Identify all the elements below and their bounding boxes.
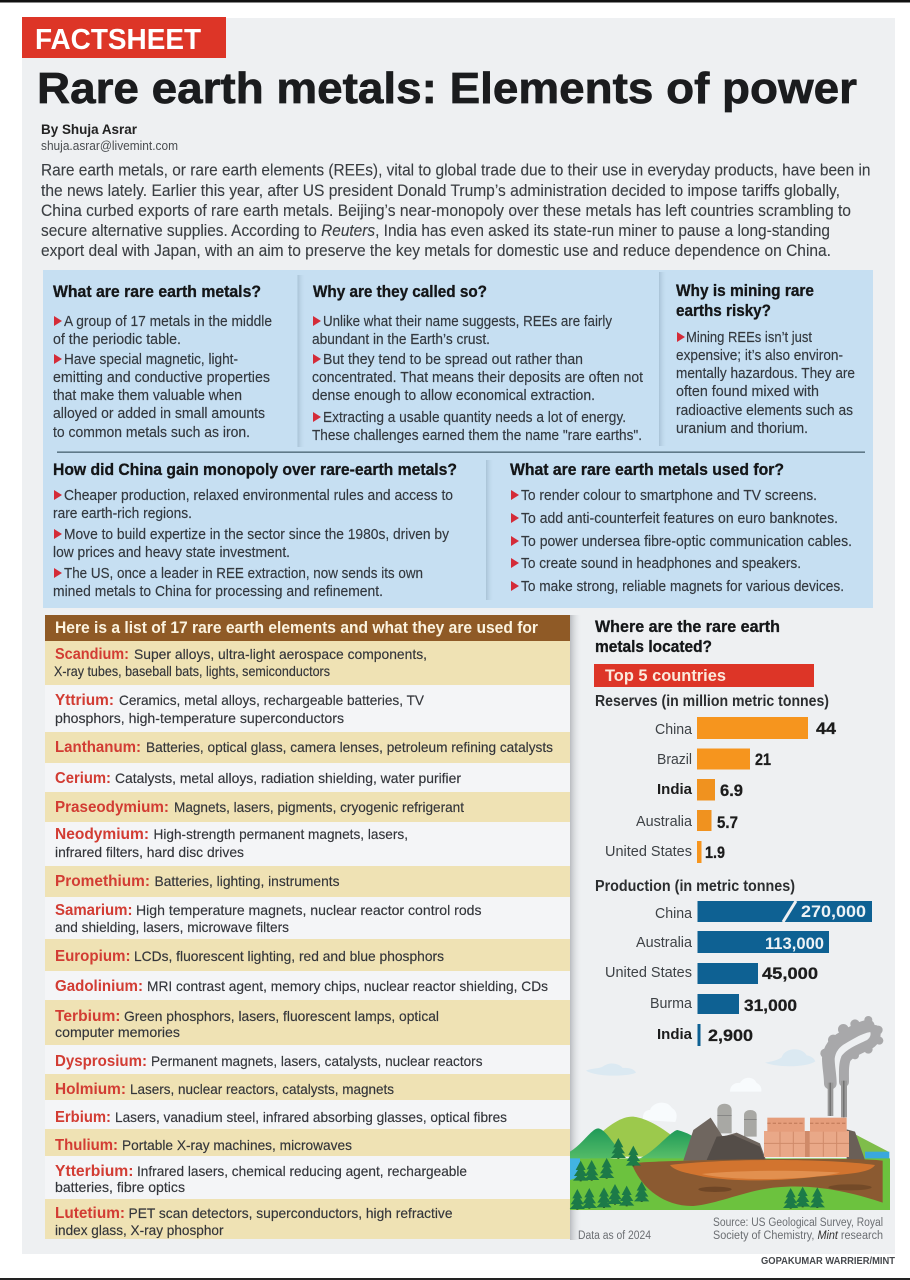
intro paragraph: China curbed exports of rare earth metals. Beijing’s near-monopoly over these metals has left countries scrambling to [41,202,851,220]
row: Terbium: computer memories [55,1024,180,1040]
ground [570,1158,890,1210]
row: Terbium: Terbium: [55,1008,120,1025]
section: china monopoly: low prices and heavy state investment. [53,545,290,561]
banner: top 5 countries: Top 5 countries [605,667,726,685]
section: why is mining risky: radioactive elements such as [676,403,853,419]
chart: reserves: 44 [816,720,837,738]
row: Scandium [45,641,570,685]
row: Erbium [45,1100,570,1129]
list header [45,615,570,641]
chart: production: Burma [650,996,693,1012]
section: what are rare earth metals: What are rare earth metals? [53,283,261,301]
chart: reserves: Australia [636,814,693,830]
trees [570,1138,825,1210]
row: Yttrium: Yttrium: [55,692,114,709]
chimneys [828,1081,847,1117]
row: Promethium [45,866,570,897]
chart: production: 2,900 [708,1027,753,1045]
row: Praseodymium [45,792,570,822]
section: uses: To power undersea fibre-optic communication cables. [521,534,852,550]
row: Ytterbium: Ytterbium: [55,1163,134,1180]
row: Holmium: Holmium: [55,1081,126,1098]
section: what are rare earth metals [53,283,272,441]
row: Lutetium [45,1199,570,1239]
chart: reserves: India [657,782,693,798]
row: Yttrium: Ceramics, metal alloys, rechargeable batteries, TV [119,692,425,708]
chart: production: 113,000 [765,935,824,953]
section: uses: To add anti-counterfeit features on euro banknotes. [521,511,838,527]
row: Ytterbium: batteries, fibre optics [55,1179,185,1195]
section: why are they called so: abundant in the Earth’s crust. [312,332,490,348]
chart: reserves [595,693,837,863]
intro paragraph: secure alternative supplies. According to Reuters, India has even asked its state-run miner to pause a long-standing [41,222,830,240]
chart: production: Australia [636,935,693,951]
row: Neodymium [45,822,570,866]
row: Holmium [45,1074,570,1100]
section: china monopoly: Cheaper production, relaxed environmental rules and access to [64,488,453,504]
section: china monopoly: mined metals to China for processing and refinement. [53,584,383,600]
row: Erbium: Lasers, vanadium steel, infrared absorbing glasses, optical fibres [115,1109,507,1125]
chart: reserves: Reserves (in million metric tonnes) [595,693,829,710]
row: Europium: LCDs, fluorescent lighting, red and blue phosphors [134,948,444,964]
row: Gadolinium: MRI contrast agent, memory chips, nuclear reactor shielding, CDs [147,978,548,994]
section: what are rare earth metals: Have special magnetic, light- [64,352,238,368]
row: Lutetium: PET scan detectors, superconductors, high refractive [128,1205,453,1221]
row: Gadolinium [45,971,570,1000]
rock piles [683,1118,865,1161]
intro paragraph: the news lately. Earlier this year, after US president Donald Trump’s administration decided to impose tariffs globally, [41,182,840,200]
section: why is mining risky: earths risky? [676,302,771,320]
row: Praseodymium: Magnets, lasers, pigments, cryogenic refrigerant [174,799,464,815]
section: why is mining risky: Why is mining rare [676,282,814,300]
chart: production: United States [605,965,692,981]
row: Samarium: and shielding, lasers, microwave filters [55,919,289,935]
factsheet tag: FACTSHEET [35,24,201,56]
section: what are rare earth metals: that make them valuable when [53,388,242,404]
section: why is mining risky: expensive; it’s also environ- [676,348,843,364]
section: why are they called so: dense enough to allow economical extraction. [312,388,595,404]
section: china monopoly: rare earth-rich regions. [53,506,192,522]
row: Neodymium: Neodymium: [55,826,149,843]
credit: GOPAKUMAR WARRIER/MINT [761,1255,896,1267]
row: Lanthanum [45,732,570,763]
row: Samarium: Samarium: [55,902,132,919]
section: why are they called so [312,283,643,444]
row: Europium: Europium: [55,948,130,965]
factsheet tag [22,17,226,58]
row: Lanthanum: Batteries, optical glass, camera lenses, petroleum refining catalysts [146,739,553,755]
section: china monopoly: The US, once a leader in REE extraction, now sends its own [64,566,423,582]
chart: production: 270,000 [801,903,866,921]
byline: shuja.asrar@livemint.com [41,139,178,153]
section: uses: To render colour to smartphone and TV screens. [521,488,817,504]
section: what are rare earth metals: A group of 17 metals in the middle [64,314,272,330]
section: what are rare earth metals: emitting and conductive properties [53,370,270,386]
section: what are rare earth metals: alloyed or added in small amounts [53,406,265,422]
section: why are they called so: Why are they called so? [313,283,487,301]
chart: reserves: Brazil [657,752,692,768]
row: Ytterbium: Infrared lasers, chemical reducing agent, rechargeable [137,1163,467,1179]
row: Lanthanum: Lanthanum: [55,739,141,756]
section: why are they called so: These challenges earned them the name "rare earths". [312,428,642,444]
section: why is mining risky: uranium and thorium. [676,421,808,437]
row: Thulium: Thulium: [55,1137,118,1154]
hills [570,1117,889,1182]
panel: explainer questions [43,270,873,608]
chart: reserves: China [655,722,693,738]
row: Yttrium: phosphors, high-temperature superconductors [55,710,344,726]
intro paragraph: Rare earth metals, or rare earth elements (REEs), vital to global trade due to their use in everyday products, have been in [41,162,870,180]
byline: By Shuja Asrar [41,121,138,137]
intro paragraph: export deal with Japan, with an aim to preserve the key metals for domestic use and reduce dependence on China. [41,242,831,260]
row: Scandium: Super alloys, ultra-light aerospace components, [134,646,427,662]
banner: top 5 countries [594,664,814,687]
silos [717,1104,757,1137]
row: Promethium: Promethium: [55,873,150,890]
section: china monopoly [53,461,457,600]
section: uses [510,461,852,595]
row: Europium [45,939,570,971]
section: china monopoly: How did China gain monopoly over rare-earth metals? [53,461,457,479]
source: Society of Chemistry, Mint research [713,1230,883,1242]
byline [41,121,178,153]
mine pit [632,1159,883,1206]
row: Scandium: X-ray tubes, baseball bats, lights, semiconductors [54,663,330,679]
row: Scandium: Scandium: [55,646,129,663]
section: why are they called so: But they tend to be spread out rather than [323,352,583,368]
note: data year: Data as of 2024 [578,1230,652,1242]
chart: production: India [657,1027,693,1043]
row: Dysprosium: Dysprosium: [55,1053,147,1070]
row: Lutetium: index glass, X-ray phosphor [55,1222,224,1238]
chart: production: 31,000 [744,997,797,1015]
row: Dysprosium: Permanent magnets, lasers, catalysts, nuclear reactors [151,1053,482,1069]
row: Dysprosium [45,1045,570,1074]
list header: Here is a list of 17 rare earth elements and what they are used for [55,619,539,637]
illustration: rare earth mine [570,1016,890,1210]
row: Terbium: Green phosphors, lasers, fluorescent lamps, optical [124,1008,439,1024]
source: Source: US Geological Survey, Royal [713,1217,883,1229]
chart: reserves: 21 [755,751,771,769]
chart: reserves: 6.9 [720,782,743,800]
row: Terbium [45,1000,570,1045]
row: Promethium: Batteries, lighting, instruments [154,873,340,889]
row: Erbium: Erbium: [55,1109,111,1126]
section: why are they called so: Extracting a usable quantity needs a lot of energy. [323,410,626,426]
row: Samarium [45,897,570,939]
section: uses: To make strong, reliable magnets for various devices. [521,579,844,595]
row: Lutetium: Lutetium: [55,1205,125,1222]
section: china monopoly: Move to build expertize in the sector since the 1980s, driven by [64,527,450,543]
smoke [820,1016,883,1083]
factory buildings [764,1118,849,1157]
section: why are they called so: concentrated. That means their deposits are often not [312,370,643,386]
heading: where located [595,618,780,656]
chart: production [595,878,872,1046]
panel: list of 17 elements [45,615,582,1240]
section: why is mining risky: often found mixed with [676,384,819,400]
row: Thulium [45,1129,570,1156]
row: Yttrium [45,685,570,732]
section: uses: To create sound in headphones and speakers. [521,556,801,572]
chart: production: Production (in metric tonnes) [595,878,795,895]
row: Gadolinium: Gadolinium: [55,978,143,995]
heading: where located: Where are the rare earth [595,618,780,636]
section: why is mining risky [676,282,855,437]
section: what are rare earth metals: of the periodic table. [53,332,181,348]
section: what are rare earth metals: to common metals such as iron. [53,425,250,441]
section: why is mining risky: Mining REEs isn’t just [686,330,812,346]
clouds [586,1049,815,1122]
intro paragraph [41,162,870,260]
row: Neodymium: High-strength permanent magnets, lasers, [154,826,408,842]
row: Holmium: Lasers, nuclear reactors, catalysts, magnets [130,1081,394,1097]
chart: reserves: 5.7 [717,814,738,832]
row: Samarium: High temperature magnets, nuclear reactor control rods [136,902,481,918]
row: Neodymium: infrared filters, hard disc drives [55,844,244,860]
chart: reserves: 1.9 [705,844,725,862]
title: Rare earth metals: Elements of power [37,64,857,113]
row: Cerium [45,763,570,792]
row: Cerium: Cerium: [55,770,111,787]
row: Thulium: Portable X-ray machines, microwaves [122,1137,352,1153]
chart: production: China [655,906,693,922]
section: why are they called so: Unlike what their name suggests, REEs are fairly [323,314,613,330]
row: Ytterbium [45,1156,570,1199]
section: why is mining risky: mentally hazardous. They are [676,366,855,382]
row: Praseodymium: Praseodymium: [55,799,169,816]
heading: where located: metals located? [595,638,712,656]
row: Cerium: Catalysts, metal alloys, radiation shielding, water purifier [115,770,461,786]
chart: reserves: United States [605,844,692,860]
source [713,1217,883,1242]
section: uses: What are rare earth metals used for? [510,461,784,479]
chart: production: 45,000 [762,965,818,983]
